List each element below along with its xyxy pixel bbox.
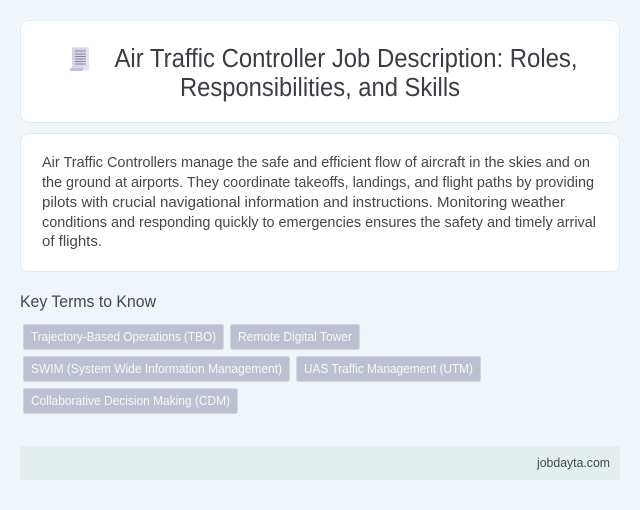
text block: description: the ground at airports. They coordinate takeoffs, landings, and flight paths by providing — [42, 174, 594, 191]
text block: description: Air Traffic Controllers manage the safe and efficient flow of aircraft in the skies and on — [42, 154, 590, 171]
text block: description: of flights. — [42, 233, 102, 250]
panel: title card — [20, 20, 620, 122]
title: Responsibilities, and Skills — [180, 74, 460, 102]
text block: description — [42, 154, 596, 250]
tag: SWIM — [24, 356, 290, 382]
heading: key terms: Key Terms to Know — [20, 293, 156, 311]
tag: UTM: UAS Traffic Management (UTM) — [304, 362, 473, 376]
text block: description: pilots with crucial navigational information and instructions. Monitoring weather — [42, 194, 565, 211]
panel: description — [20, 134, 620, 272]
footer bar — [20, 446, 620, 480]
tag: remote tower — [230, 324, 360, 350]
icon: paper scroll — [70, 48, 89, 71]
title — [114, 45, 578, 102]
tag: CDM — [24, 388, 238, 414]
tag: remote tower: Remote Digital Tower — [238, 330, 352, 344]
tag list: key terms — [24, 324, 480, 414]
title: Air Traffic Controller Job Description: Roles, — [114, 45, 578, 73]
tag: CDM: Collaborative Decision Making (CDM) — [31, 394, 230, 408]
tag: UTM — [296, 356, 480, 382]
tag: TBO: Trajectory-Based Operations (TBO) — [31, 330, 216, 344]
tag: SWIM: SWIM (System Wide Information Management) — [31, 362, 282, 376]
text block: description: conditions and responding quickly to emergencies ensures the safety and timely arrival — [42, 214, 596, 231]
tag: TBO — [24, 324, 224, 350]
footer text: jobdayta.com — [536, 456, 610, 470]
